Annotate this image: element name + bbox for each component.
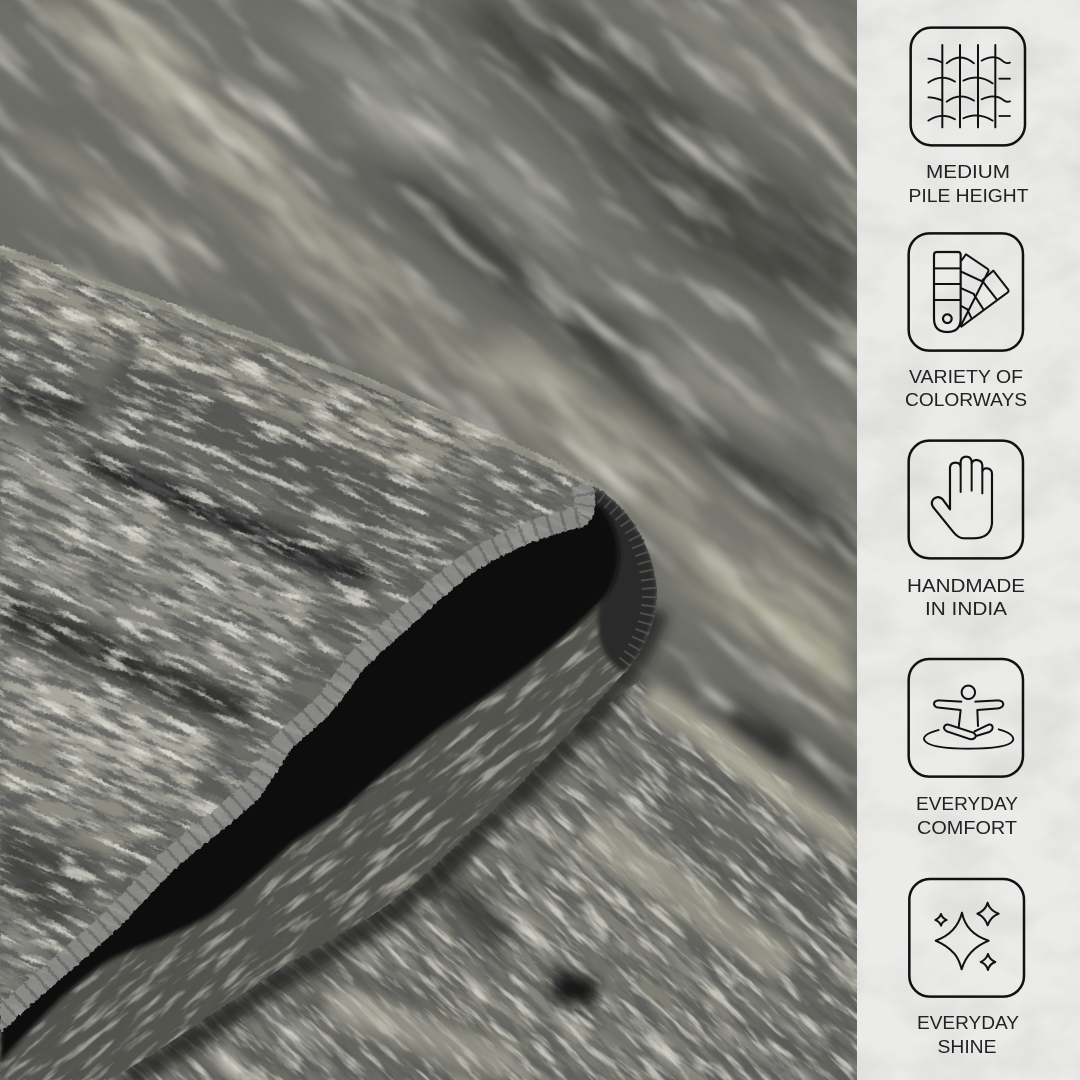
flap top highlight [0, 248, 590, 481]
label: EVERYDAY [917, 1012, 1019, 1033]
rug surface diagonal streaks [0, 0, 857, 1080]
feature: medium pile height: PILE HEIGHT [908, 185, 1028, 206]
band weave texture [0, 486, 657, 1080]
folded rug flap [0, 240, 610, 1040]
icon: woven pile [911, 28, 1025, 145]
flap sharp weave texture [0, 240, 610, 1040]
label: VARIETY OF [909, 366, 1023, 387]
rug surface soft streak texture [0, 0, 857, 1080]
feature: everyday shine: SHINE [938, 1036, 996, 1057]
feature: everyday comfort: COMFORT [917, 817, 1017, 838]
label: HANDMADE [907, 575, 1025, 596]
feature: variety of colorways [905, 233, 1027, 410]
icon: seated figure [909, 659, 1023, 777]
icon: hand [909, 441, 1023, 558]
label: MEDIUM [926, 161, 1010, 182]
fold underside band [0, 486, 658, 1080]
icon: sparkles [909, 879, 1024, 997]
rug photograph [0, 0, 857, 1080]
band rim stitches [595, 490, 652, 670]
feature: everyday shine [909, 879, 1024, 1057]
feature: handmade in india [907, 441, 1025, 619]
feature: variety of colorways: COLORWAYS [905, 389, 1027, 410]
flap base [0, 240, 610, 1040]
icon: colour swatch fan [909, 233, 1023, 351]
feature: handmade in india: IN INDIA [925, 598, 1008, 619]
shadow below fold [125, 610, 657, 1080]
feature: everyday comfort [909, 659, 1023, 838]
lower rug light and dark flecks [320, 680, 857, 1080]
rug base surface [0, 0, 857, 1080]
feature: medium pile height [908, 28, 1028, 206]
flap edge stitches [0, 478, 595, 1033]
lower rug sharp weave texture [100, 680, 857, 1080]
flap woven stripes [0, 255, 500, 1000]
flap bound edge [0, 478, 595, 1033]
fold dark cavity [0, 500, 619, 1063]
side panel background [857, 0, 1080, 1080]
band shaded top rim [590, 488, 657, 672]
label: EVERYDAY [916, 793, 1018, 814]
